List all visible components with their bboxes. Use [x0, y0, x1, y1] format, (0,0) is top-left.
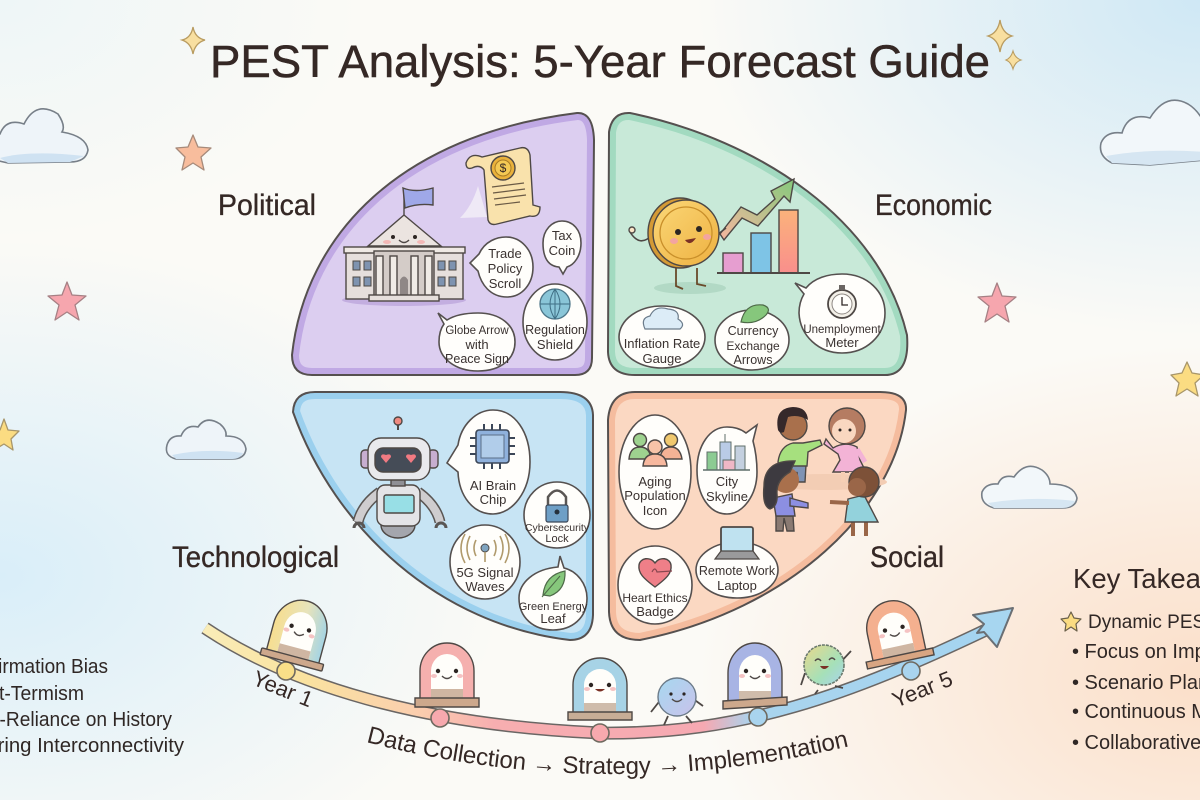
speech bubble: globe arrow with peace sign: [438, 313, 515, 371]
speech bubble: trade policy scroll: Policy: [488, 261, 523, 276]
speech bubble: heart ethics badge: [618, 546, 692, 624]
speech bubble: tax coin: Tax: [552, 228, 573, 243]
speech bubble: trade policy scroll: [470, 237, 533, 297]
panel: political: [292, 113, 594, 375]
speech bubble: unemployment meter: [795, 274, 885, 353]
character: round blue walker: [651, 678, 703, 725]
character: arch data collection: [415, 643, 479, 707]
child: girl with long hair: [764, 461, 808, 531]
icon: sparkle top right: [988, 20, 1012, 52]
speech bubble: inflation rate gauge: Inflation Rate: [624, 336, 700, 351]
star: pink right: [978, 283, 1016, 322]
speech bubble: ai brain chip: AI Brain: [470, 478, 516, 493]
star: yellow right: [1171, 362, 1200, 396]
illustration: children holding hands: [763, 407, 887, 536]
milestone: strategy node: [591, 724, 609, 742]
title: PEST Analysis: 5-Year Forecast Guide: [210, 36, 990, 87]
icon: coin character: [629, 198, 726, 294]
speech bubble: green energy leaf: [519, 556, 588, 630]
panel: economic: [608, 113, 907, 375]
icon: government building: [342, 188, 466, 306]
speech bubble: heart ethics badge: Badge: [636, 604, 674, 619]
child: child in teal dress: [830, 467, 879, 536]
character: arch year 1: [260, 593, 338, 671]
icon: robot: [354, 417, 446, 538]
speech bubble: green energy leaf: Leaf: [540, 611, 566, 626]
star: yellow left: [0, 419, 19, 450]
speech bubble: remote work laptop: Laptop: [717, 578, 757, 593]
speech bubble: regulation shield: Shield: [537, 337, 573, 352]
speech bubble: cybersecurity lock: [524, 482, 590, 548]
child: boy in green shirt: [777, 407, 822, 482]
speech bubble: currency exchange arrows: Arrows: [734, 353, 772, 367]
timeline arrow: [205, 608, 1013, 733]
speech bubble: remote work laptop: [696, 527, 778, 598]
speech bubble: city skyline: [697, 425, 757, 514]
speech bubble: inflation rate gauge: Gauge: [642, 351, 682, 366]
speech bubble: 5g signal waves: Waves: [465, 579, 505, 594]
milestone: year 5 node: [902, 662, 920, 680]
speech bubble: aging population icon: [619, 415, 691, 529]
speech bubble: inflation rate gauge: [619, 306, 705, 368]
icon: scroll with coin: [460, 148, 540, 224]
label: economic: Economic: [875, 189, 992, 222]
label: political: Political: [218, 189, 316, 222]
speech bubble: 5g signal waves: 5G Signal: [456, 565, 514, 580]
panel: social: [608, 392, 906, 640]
cloud: top right: [1100, 100, 1200, 165]
speech bubble: trade policy scroll: Trade: [488, 246, 522, 261]
speech bubble: regulation shield: Regulation: [525, 323, 585, 337]
label: process stages: Data Collection → Strategy → Implementation: [368, 726, 848, 779]
icon: sparkle top left: [182, 27, 205, 54]
speech bubble: currency exchange arrows: [715, 305, 789, 370]
label: year 5: Year 5: [889, 666, 956, 713]
cloud: top left: [0, 109, 88, 163]
milestone: implementation node: [749, 708, 767, 726]
speech bubble: currency exchange arrows: Exchange: [726, 339, 780, 353]
milestone: data collection node: [431, 709, 449, 727]
speech bubble: tax coin: Coin: [549, 243, 575, 258]
speech bubble: unemployment meter: Meter: [825, 335, 859, 350]
speech bubble: cybersecurity lock: Cybersecurity: [525, 522, 590, 534]
label: year 1: Year 1: [249, 665, 317, 712]
icon: scroll with coin: $: [500, 161, 507, 175]
character: round green walker: [801, 645, 851, 694]
speech bubble: tax coin: [543, 221, 581, 274]
speech bubble: aging population icon: Icon: [643, 503, 667, 518]
speech bubble: cybersecurity lock: Lock: [545, 533, 569, 545]
chart: mini bars with growth arrow: [717, 179, 810, 273]
child: girl in pink dress: [824, 408, 866, 482]
speech bubble: globe arrow with peace sign: Peace Sign: [445, 352, 509, 366]
character: arch year 5: [855, 594, 934, 669]
speech bubble: unemployment meter: Unemployment: [803, 324, 881, 336]
speech bubble: trade policy scroll: Scroll: [489, 276, 521, 291]
milestone: year 1 node: [277, 662, 295, 680]
icon: small sparkle top right: [1006, 51, 1021, 69]
speech bubble: aging population icon: Aging: [638, 474, 672, 489]
star: pink left: [48, 282, 86, 320]
list: common pitfalls: [0, 656, 184, 757]
cloud: lower right: [982, 466, 1077, 508]
speech bubble: green energy leaf: Green Energy: [519, 601, 588, 613]
speech bubble: aging population icon: Population: [624, 488, 686, 503]
speech bubble: heart ethics badge: Heart Ethics: [622, 591, 688, 605]
speech bubble: city skyline: Skyline: [706, 489, 748, 504]
character: arch strategy: [568, 658, 632, 720]
character: arch implementation: [723, 643, 787, 709]
cloud: middle left: [166, 420, 246, 459]
speech bubble: ai brain chip: Chip: [480, 492, 506, 507]
speech bubble: regulation shield: [523, 284, 587, 360]
speech bubble: ai brain chip: [447, 410, 530, 514]
star: peach: [176, 135, 211, 170]
label: technological: Technological: [172, 541, 339, 574]
speech bubble: globe arrow with peace sign: with: [464, 337, 489, 352]
label: social: Social: [870, 541, 944, 574]
speech bubble: city skyline: City: [716, 474, 739, 489]
panel: technological: [293, 392, 593, 640]
list: key takeaways: [1061, 563, 1200, 754]
speech bubble: globe arrow with peace sign: Globe Arrow: [445, 325, 509, 337]
speech bubble: remote work laptop: Remote Work: [699, 564, 776, 578]
speech bubble: currency exchange arrows: Currency: [728, 324, 779, 338]
speech bubble: 5g signal waves: [450, 525, 520, 599]
